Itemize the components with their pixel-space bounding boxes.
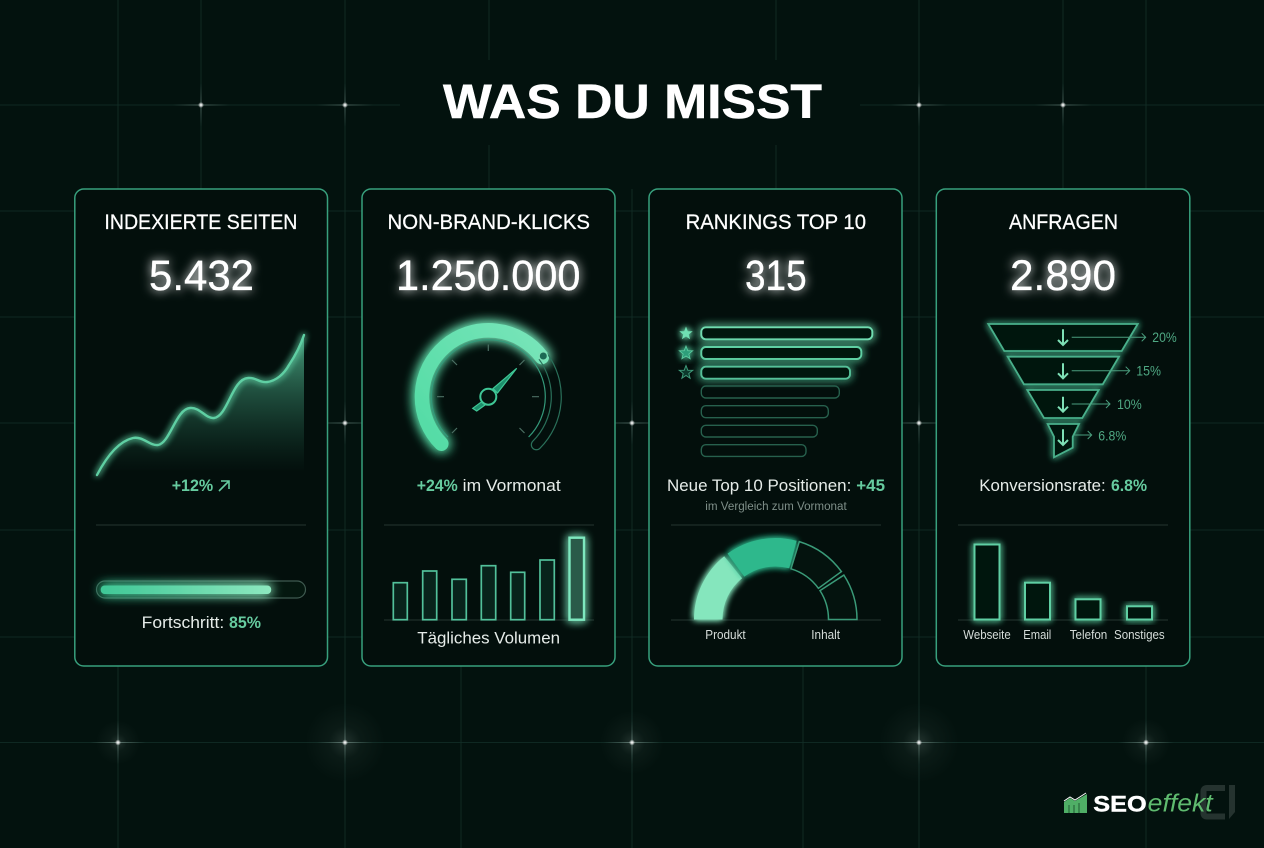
area chart <box>97 335 304 475</box>
label: Sonstiges: Sonstiges <box>1114 628 1165 642</box>
watermark mark <box>1204 785 1235 819</box>
ranking bars <box>701 327 872 456</box>
progress label: Fortschritt: <box>142 613 224 632</box>
title: WAS DU MISST <box>443 76 822 129</box>
logo: SEO effekt <box>1064 790 1214 818</box>
progress label: 85% <box>229 613 261 632</box>
label: 15%: 15% <box>1136 363 1161 379</box>
label: 10%: 10% <box>1117 396 1142 412</box>
stars <box>679 326 693 378</box>
semicircle chart <box>694 538 857 620</box>
change: +12%: +12% <box>172 476 213 495</box>
logo icon <box>1064 793 1087 813</box>
decorative stars <box>90 83 1174 782</box>
heading: non-brand-klicks: NON-BRAND-KLICKS <box>388 211 590 234</box>
subtext: im Vergleich zum Vormonat <box>705 501 848 513</box>
panel: rankings top 10 <box>649 189 902 666</box>
progress bar <box>96 581 306 598</box>
logo text: SEO: SEO <box>1093 792 1147 817</box>
label: 20%: 20% <box>1152 329 1177 345</box>
label: Tägliches Volumen: Tägliches Volumen <box>417 628 560 648</box>
label: Webseite: Webseite <box>963 628 1011 642</box>
logo text: effekt: effekt <box>1148 790 1214 818</box>
heading: anfragen: ANFRAGEN <box>1009 211 1118 234</box>
conversion rate: 6.8% <box>1111 476 1147 495</box>
heading: indexierte seiten: INDEXIERTE SEITEN <box>104 211 297 234</box>
heading: rankings top 10: RANKINGS TOP 10 <box>686 211 866 234</box>
change: +45: Neue Top 10 Positionen: <box>667 476 851 495</box>
progress label <box>142 613 261 632</box>
bar chart: channels <box>974 544 1152 620</box>
bar chart: daily volume <box>393 538 584 620</box>
value: 2.890: 2.890 <box>1010 252 1116 300</box>
panel: indexierte seiten <box>75 189 328 666</box>
panel: non-brand-klicks <box>362 189 615 666</box>
change: +24% im Vormonat: +24% <box>417 476 458 495</box>
panel: anfragen <box>936 189 1190 666</box>
value: 315: 315 <box>745 252 807 300</box>
label: Inhalt: Inhalt <box>811 628 840 642</box>
funnel <box>988 324 1146 457</box>
label: Email: Email <box>1023 628 1051 642</box>
value: 5.432: 5.432 <box>149 252 254 300</box>
conversion rate: Konversionsrate: <box>979 476 1106 495</box>
gauge <box>422 330 561 450</box>
label: Produkt: Produkt <box>705 628 746 642</box>
value: 1.250.000: 1.250.000 <box>396 252 580 300</box>
change: +24% im Vormonat <box>417 476 561 495</box>
change: +45: +45 <box>856 476 885 495</box>
label: Telefon: Telefon <box>1070 628 1107 642</box>
label: 6.8%: 6.8% <box>1098 428 1126 444</box>
change: +24% im Vormonat: im Vormonat <box>463 476 561 495</box>
